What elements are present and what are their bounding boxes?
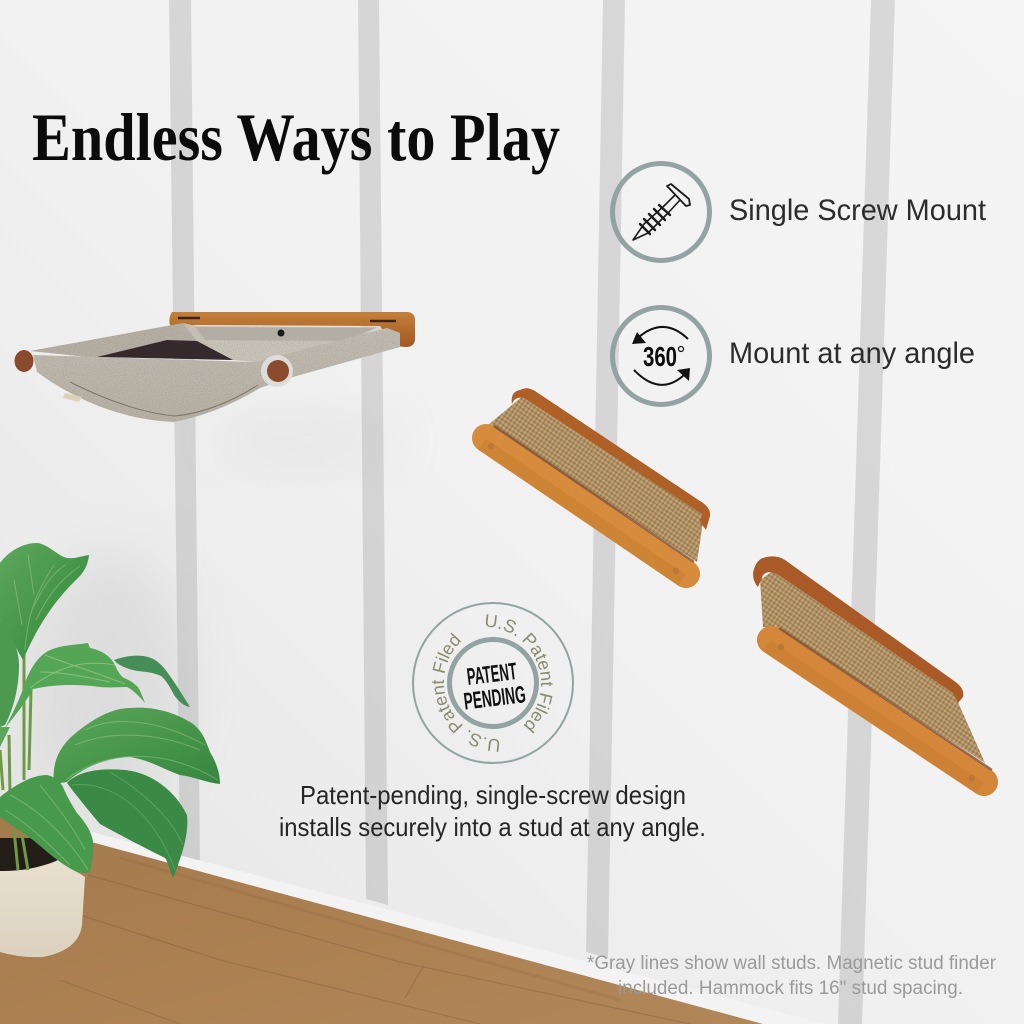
footnote — [587, 953, 997, 999]
metal ring — [261, 355, 293, 387]
leaf front veins — [5, 785, 88, 870]
description text — [279, 780, 706, 842]
leaf large lower veins — [72, 772, 183, 870]
rear board — [512, 388, 710, 530]
potted plant — [0, 543, 220, 957]
left wood knob — [14, 350, 34, 372]
leaf top veins — [14, 555, 80, 650]
label: single screw mount: Single Screw Mount — [729, 194, 987, 227]
description text: installs securely into a stud at any angle. — [279, 812, 706, 842]
seam — [70, 382, 258, 416]
label: mount at any angle: Mount at any angle — [729, 337, 975, 370]
right wood knob — [267, 360, 289, 382]
hammock — [14, 312, 415, 422]
front sling — [33, 328, 400, 422]
front plank — [771, 640, 984, 782]
seal ring text repeat: U.S. Patent Filed — [432, 632, 500, 752]
sisal — [488, 396, 704, 562]
patent pending seal — [412, 602, 574, 764]
leaf middle veins — [30, 655, 125, 688]
woven pot — [0, 860, 85, 957]
leaf large upper — [54, 708, 220, 784]
soft wall shadow behind plant — [30, 550, 190, 810]
leaf drooping right — [114, 656, 190, 707]
soft wall shadow under hammock — [220, 416, 400, 464]
leaf large lower — [67, 769, 187, 878]
title: Endless Ways to Play — [32, 99, 560, 175]
icon: 360 degree rotation: 360 — [643, 341, 677, 372]
left inner fabric — [30, 323, 197, 358]
seal centre text: PATENT — [465, 658, 518, 691]
soil — [0, 838, 60, 872]
sisal — [760, 568, 985, 763]
hammock wood mounting board — [169, 312, 415, 347]
footnote: included. Hammock fits 16" stud spacing. — [618, 978, 963, 999]
leaf left lower tip — [0, 727, 10, 747]
leaf front — [0, 775, 93, 873]
seal centre text: PENDING — [462, 681, 527, 716]
seal centre text — [459, 657, 527, 716]
tag — [63, 393, 82, 402]
description text: Patent-pending, single-screw design — [300, 780, 686, 810]
footnote: *Gray lines show wall studs. Magnetic stud finder — [587, 953, 997, 974]
leaf top — [0, 543, 89, 660]
mounting slots — [178, 318, 396, 321]
scratching platform: right — [753, 556, 992, 788]
stems — [0, 650, 31, 870]
floor and baseboard — [0, 806, 825, 1024]
leaf large upper veins — [66, 722, 218, 780]
back fabric — [183, 323, 377, 362]
icon: screw in circle — [612, 164, 710, 260]
wall studs — [169, 0, 895, 1024]
leaf left — [0, 620, 19, 727]
front plank — [486, 438, 686, 574]
scratching platform: middle — [482, 388, 710, 580]
rear board — [753, 556, 963, 703]
icon: 360 degree rotation — [612, 308, 710, 404]
dark cushion — [97, 340, 233, 360]
seal ring text: U.S. Patent Filed — [486, 614, 553, 734]
leaf middle — [5, 643, 145, 728]
